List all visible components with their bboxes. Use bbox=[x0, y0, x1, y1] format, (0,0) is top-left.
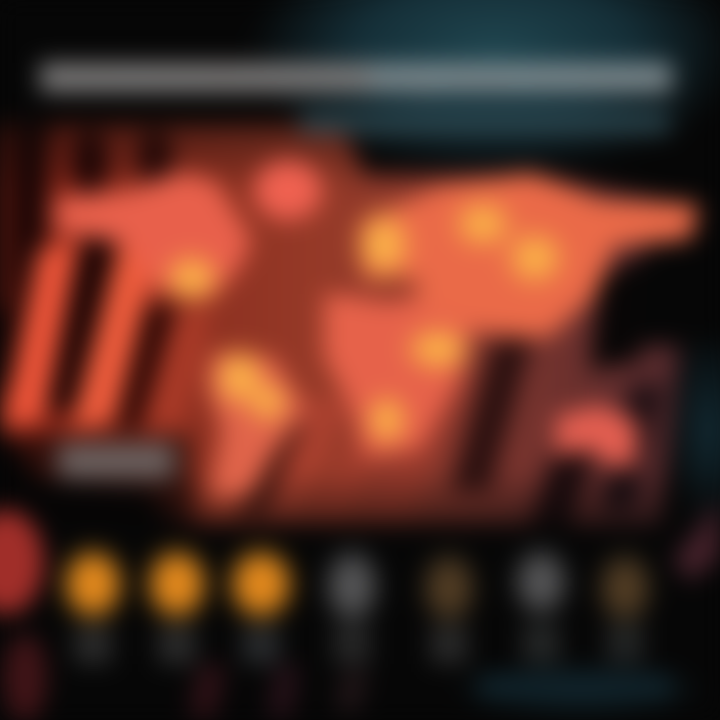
right edge streak bbox=[672, 500, 720, 582]
mediterranean dark spot bbox=[356, 276, 420, 302]
footer source note bbox=[478, 674, 672, 698]
indicator 3: 2020 bbox=[248, 636, 275, 650]
indicator 1 bbox=[57, 542, 129, 664]
world map: continents bbox=[55, 160, 698, 496]
bright stripes bbox=[2, 238, 80, 428]
lower dark gaps bbox=[236, 420, 306, 512]
left edge element bbox=[0, 510, 47, 720]
subtitle: Global distribution of recorded events bbox=[300, 115, 670, 132]
indicator 7: 2024 bbox=[612, 634, 639, 648]
map: south america bbox=[206, 352, 306, 496]
indicator 1: 2018 bbox=[80, 636, 107, 650]
map: eurasia bbox=[360, 172, 698, 338]
footer streaks bbox=[188, 665, 369, 718]
heat map backdrop bbox=[0, 125, 720, 525]
indicator 4: 2021 bbox=[339, 636, 366, 650]
map: africa bbox=[324, 294, 472, 458]
title: Prevalence of Escalating Heat Incidents bbox=[38, 62, 674, 95]
lower stripes bbox=[200, 470, 262, 520]
top and bottom fades of map bbox=[0, 115, 720, 526]
indicator 4 bbox=[320, 542, 384, 664]
indicator 3 bbox=[223, 542, 299, 664]
heat hotspots bbox=[160, 196, 569, 450]
indicator 5 bbox=[417, 546, 481, 664]
indicator 2 bbox=[141, 542, 213, 664]
indicator 6: 2023 bbox=[528, 634, 555, 648]
map: australia bbox=[556, 404, 638, 468]
footer source note: Source: global climate records bbox=[480, 679, 670, 693]
dark stripes bbox=[0, 125, 50, 400]
legend label: Heat index bbox=[62, 451, 171, 470]
map: north america bbox=[55, 172, 252, 300]
indicator 7 bbox=[593, 546, 657, 662]
map: greenland bbox=[254, 160, 322, 220]
indicator 6 bbox=[509, 542, 573, 662]
indicator 2: 2019 bbox=[164, 636, 191, 650]
legend label bbox=[58, 444, 174, 478]
indicator 5: 2022 bbox=[436, 636, 463, 650]
subtitle bbox=[300, 112, 670, 134]
year indicators row bbox=[57, 542, 657, 664]
